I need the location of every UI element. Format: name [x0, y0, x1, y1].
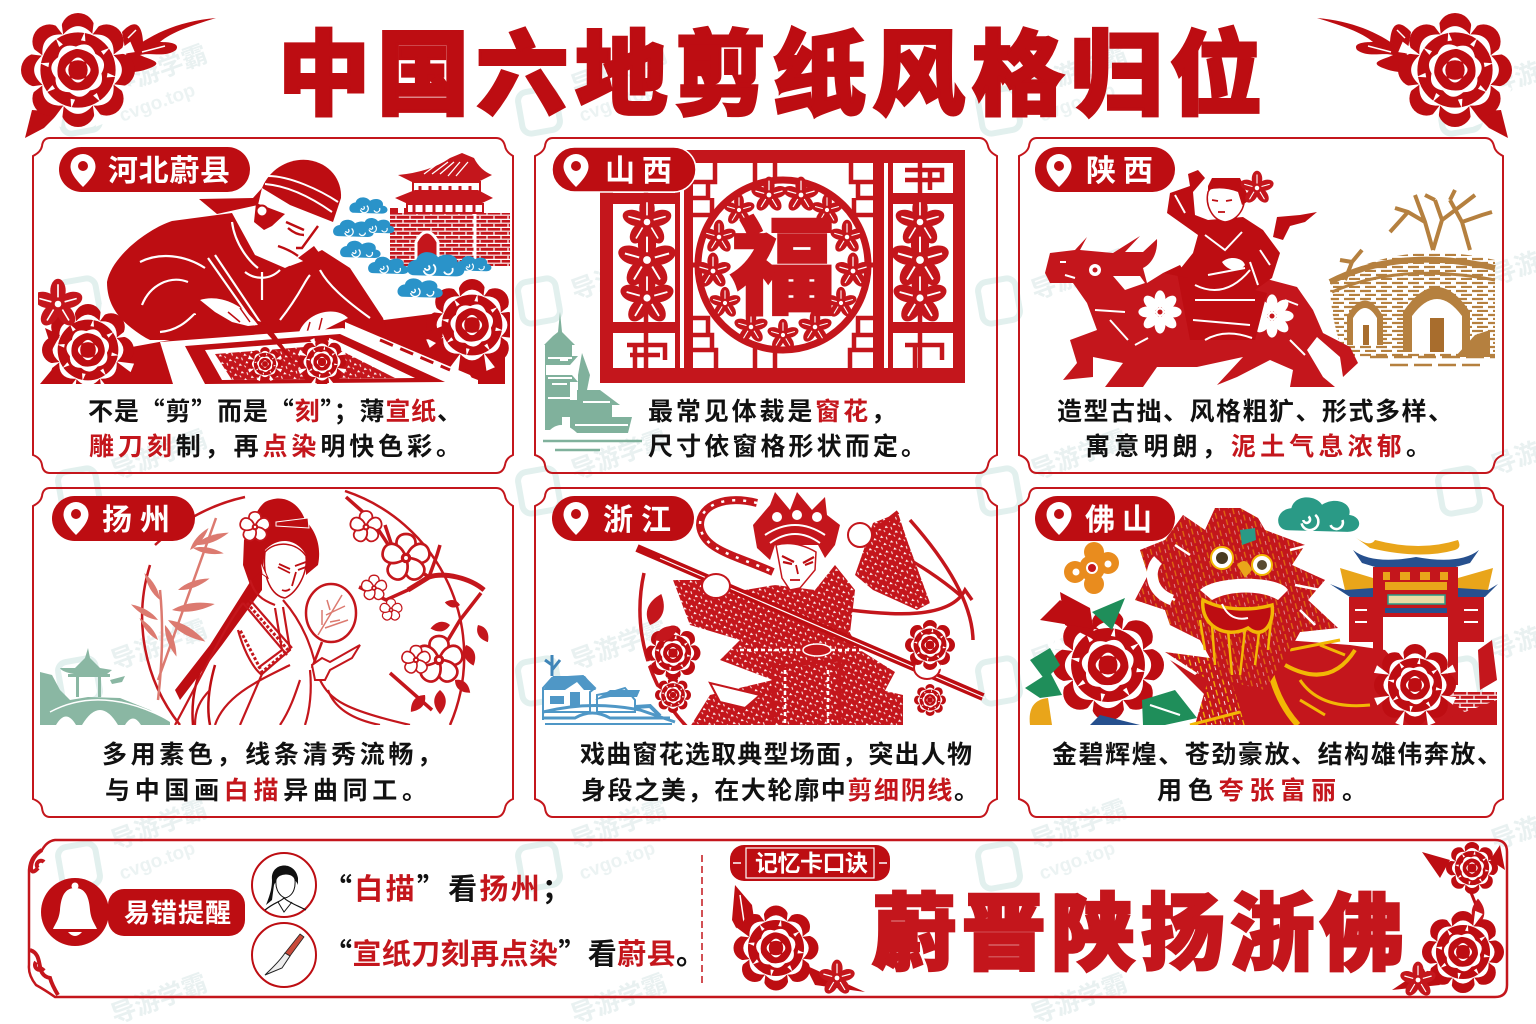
icon: lady portrait: [252, 853, 316, 917]
text: mistake lines: “宣纸刀刻再点染”看蔚县。: [323, 931, 705, 973]
bamboo: [130, 518, 230, 700]
panel: Foshan: [1019, 488, 1503, 817]
corner ornament: top left peony: [21, 13, 216, 138]
illustration: opera warrior: [637, 492, 985, 727]
text: mistake lines: [323, 866, 705, 973]
illustration: pagoda: [543, 312, 642, 450]
icon: peony bottom right: [1392, 842, 1505, 998]
watermarks: 导游学霸: [107, 245, 211, 306]
label: 山西: [552, 146, 696, 192]
label: 河北蔚县: 河北蔚县: [108, 146, 230, 190]
clouds: [333, 197, 491, 298]
peony left: [1052, 609, 1164, 721]
archway: [1330, 537, 1498, 725]
illustration: artisan carving paper: [32, 153, 518, 396]
text: Zhejiang description: 身段之美，在大轮廓中剪细阴线。: [581, 771, 979, 807]
peony right: [1374, 644, 1456, 726]
head: [753, 492, 840, 560]
panel: Shanxi: [535, 138, 997, 473]
text: Yangzhou description: [102, 735, 442, 807]
watermarks: 导游学霸: [107, 795, 211, 856]
label: 浙江: [552, 495, 694, 541]
gate tower: [390, 153, 510, 266]
orange flower: [1064, 542, 1119, 594]
icon: peony right: [426, 279, 518, 371]
label: memory card mnemonic: [730, 844, 890, 881]
text: Yangzhou description: 多用素色，线条清秀流畅，: [102, 735, 442, 771]
warrior body: [673, 565, 903, 727]
lion body: [1170, 640, 1480, 725]
illustration: window paper-cut with 福: [600, 150, 965, 383]
watermarks: 导游学霸: [567, 245, 671, 306]
watermarks: 导游学霸: [567, 40, 671, 101]
corner ornament: top right peony: [1317, 13, 1512, 138]
watermarks: cvgo.top: [1037, 838, 1118, 885]
hands: [702, 574, 730, 598]
label: 河北蔚县: [59, 146, 250, 192]
panel: Zhejiang: [535, 488, 997, 817]
watermarks: 导游学霸: [107, 615, 211, 676]
panel: Hebei Yuxian: [32, 138, 518, 473]
illustration: blue water town: [543, 655, 675, 724]
flag: [855, 513, 930, 610]
label: 陕西: [1035, 146, 1175, 192]
label: memory card mnemonic: 记忆卡口诀: [755, 844, 868, 878]
text: Shaanxi description: [1057, 392, 1453, 463]
watermarks: cvgo.top: [117, 80, 198, 127]
illustration: window paper-cut with 福: 福: [730, 184, 836, 336]
branch: [346, 497, 484, 710]
watermarks: cvgo.top: [117, 838, 198, 885]
illustration: cave dwelling: [1330, 190, 1495, 365]
watermarks: 导游学霸: [1027, 425, 1131, 486]
text: Zhejiang description: 戏曲窗花选取典型场面，突出人物: [580, 735, 972, 771]
lady robe: [175, 580, 410, 725]
text: mnemonic: 蔚晋陕扬浙佛: [872, 867, 1404, 988]
watermarks: 导游学霸: [1027, 615, 1131, 676]
text: Foshan description: 金碧辉煌、苍劲豪放、结构雄伟奔放、: [1052, 735, 1502, 771]
icon: peony left: [42, 304, 134, 384]
label: 扬州: 扬州: [102, 495, 170, 539]
text: Shaanxi description: 造型古拙、风格粗犷、形式多样、: [1057, 392, 1453, 428]
watermarks: 导游学霸: [567, 615, 671, 676]
panel: Yangzhou: [33, 488, 513, 817]
cloud teal: [1278, 497, 1359, 532]
text: Hebei description: 不是“剪”而是“刻”；薄宣纸、: [88, 392, 462, 428]
watermarks: cvgo.top: [1037, 80, 1118, 127]
text: Shanxi description: 最常见体裁是窗花，: [648, 392, 896, 428]
text: Yangzhou description: 与中国画白描异曲同工。: [105, 771, 427, 807]
text: Shaanxi description: 寓意明朗，泥土气息浓郁。: [1085, 427, 1431, 463]
text: Zhejiang description: [580, 735, 979, 807]
panel: bottom memory band: [29, 840, 1507, 998]
watermarks: cvgo.top: [577, 80, 658, 127]
lion face: [1200, 579, 1288, 600]
label: 山西: 山西: [605, 146, 672, 190]
watermarks: cvgo.top: [577, 838, 658, 885]
watermarks: 导游学霸: [107, 425, 211, 486]
lady hair: [243, 498, 319, 585]
lion mane: [1135, 508, 1338, 690]
text: mistake lines: “白描”看扬州；: [323, 866, 571, 908]
panel: Shaanxi: [1019, 138, 1503, 473]
callout: common mistakes: 易错提醒: [124, 893, 231, 930]
label: 浙江: 浙江: [603, 495, 671, 539]
label: 佛山: 佛山: [1085, 495, 1152, 539]
illustration: ox with child: [1045, 170, 1358, 387]
watermarks: 导游学霸: [1027, 40, 1131, 101]
text: Shanxi description: 尺寸依窗格形状而定。: [648, 427, 926, 463]
label: 佛山: [1035, 495, 1175, 541]
watermarks: 导游学霸: [107, 40, 211, 101]
illustration: lion dance, peony and gate: [1025, 497, 1498, 726]
text: Hebei description: 雕刀刻制，再点染明快色彩。: [89, 427, 461, 463]
watermarks: 导游学霸: [567, 425, 671, 486]
icon: bell: [41, 878, 109, 946]
text: Foshan description: [1052, 735, 1502, 807]
illustration: lady with fan and plum blossoms: [130, 491, 492, 725]
spear: [637, 548, 983, 697]
label: 陕西: 陕西: [1086, 146, 1153, 190]
title: 中国六地剪纸风格归位: [278, 1, 1262, 134]
icon: peony bottom left: [732, 885, 865, 996]
illustration: green bridge: [40, 648, 170, 725]
text: Foshan description: 用色夸张富丽。: [1157, 771, 1367, 807]
watermarks: 导游学霸: [567, 795, 671, 856]
watermarks: 导游学霸: [1027, 245, 1131, 306]
flowers: [645, 625, 701, 681]
text: Hebei description: [88, 392, 462, 463]
label: 扬州: [52, 495, 195, 541]
icon: carving knife: [252, 923, 316, 987]
text: Shanxi description: [648, 392, 926, 463]
watermarks: 导游学霸: [1027, 795, 1131, 856]
callout: common mistakes: [41, 878, 245, 946]
